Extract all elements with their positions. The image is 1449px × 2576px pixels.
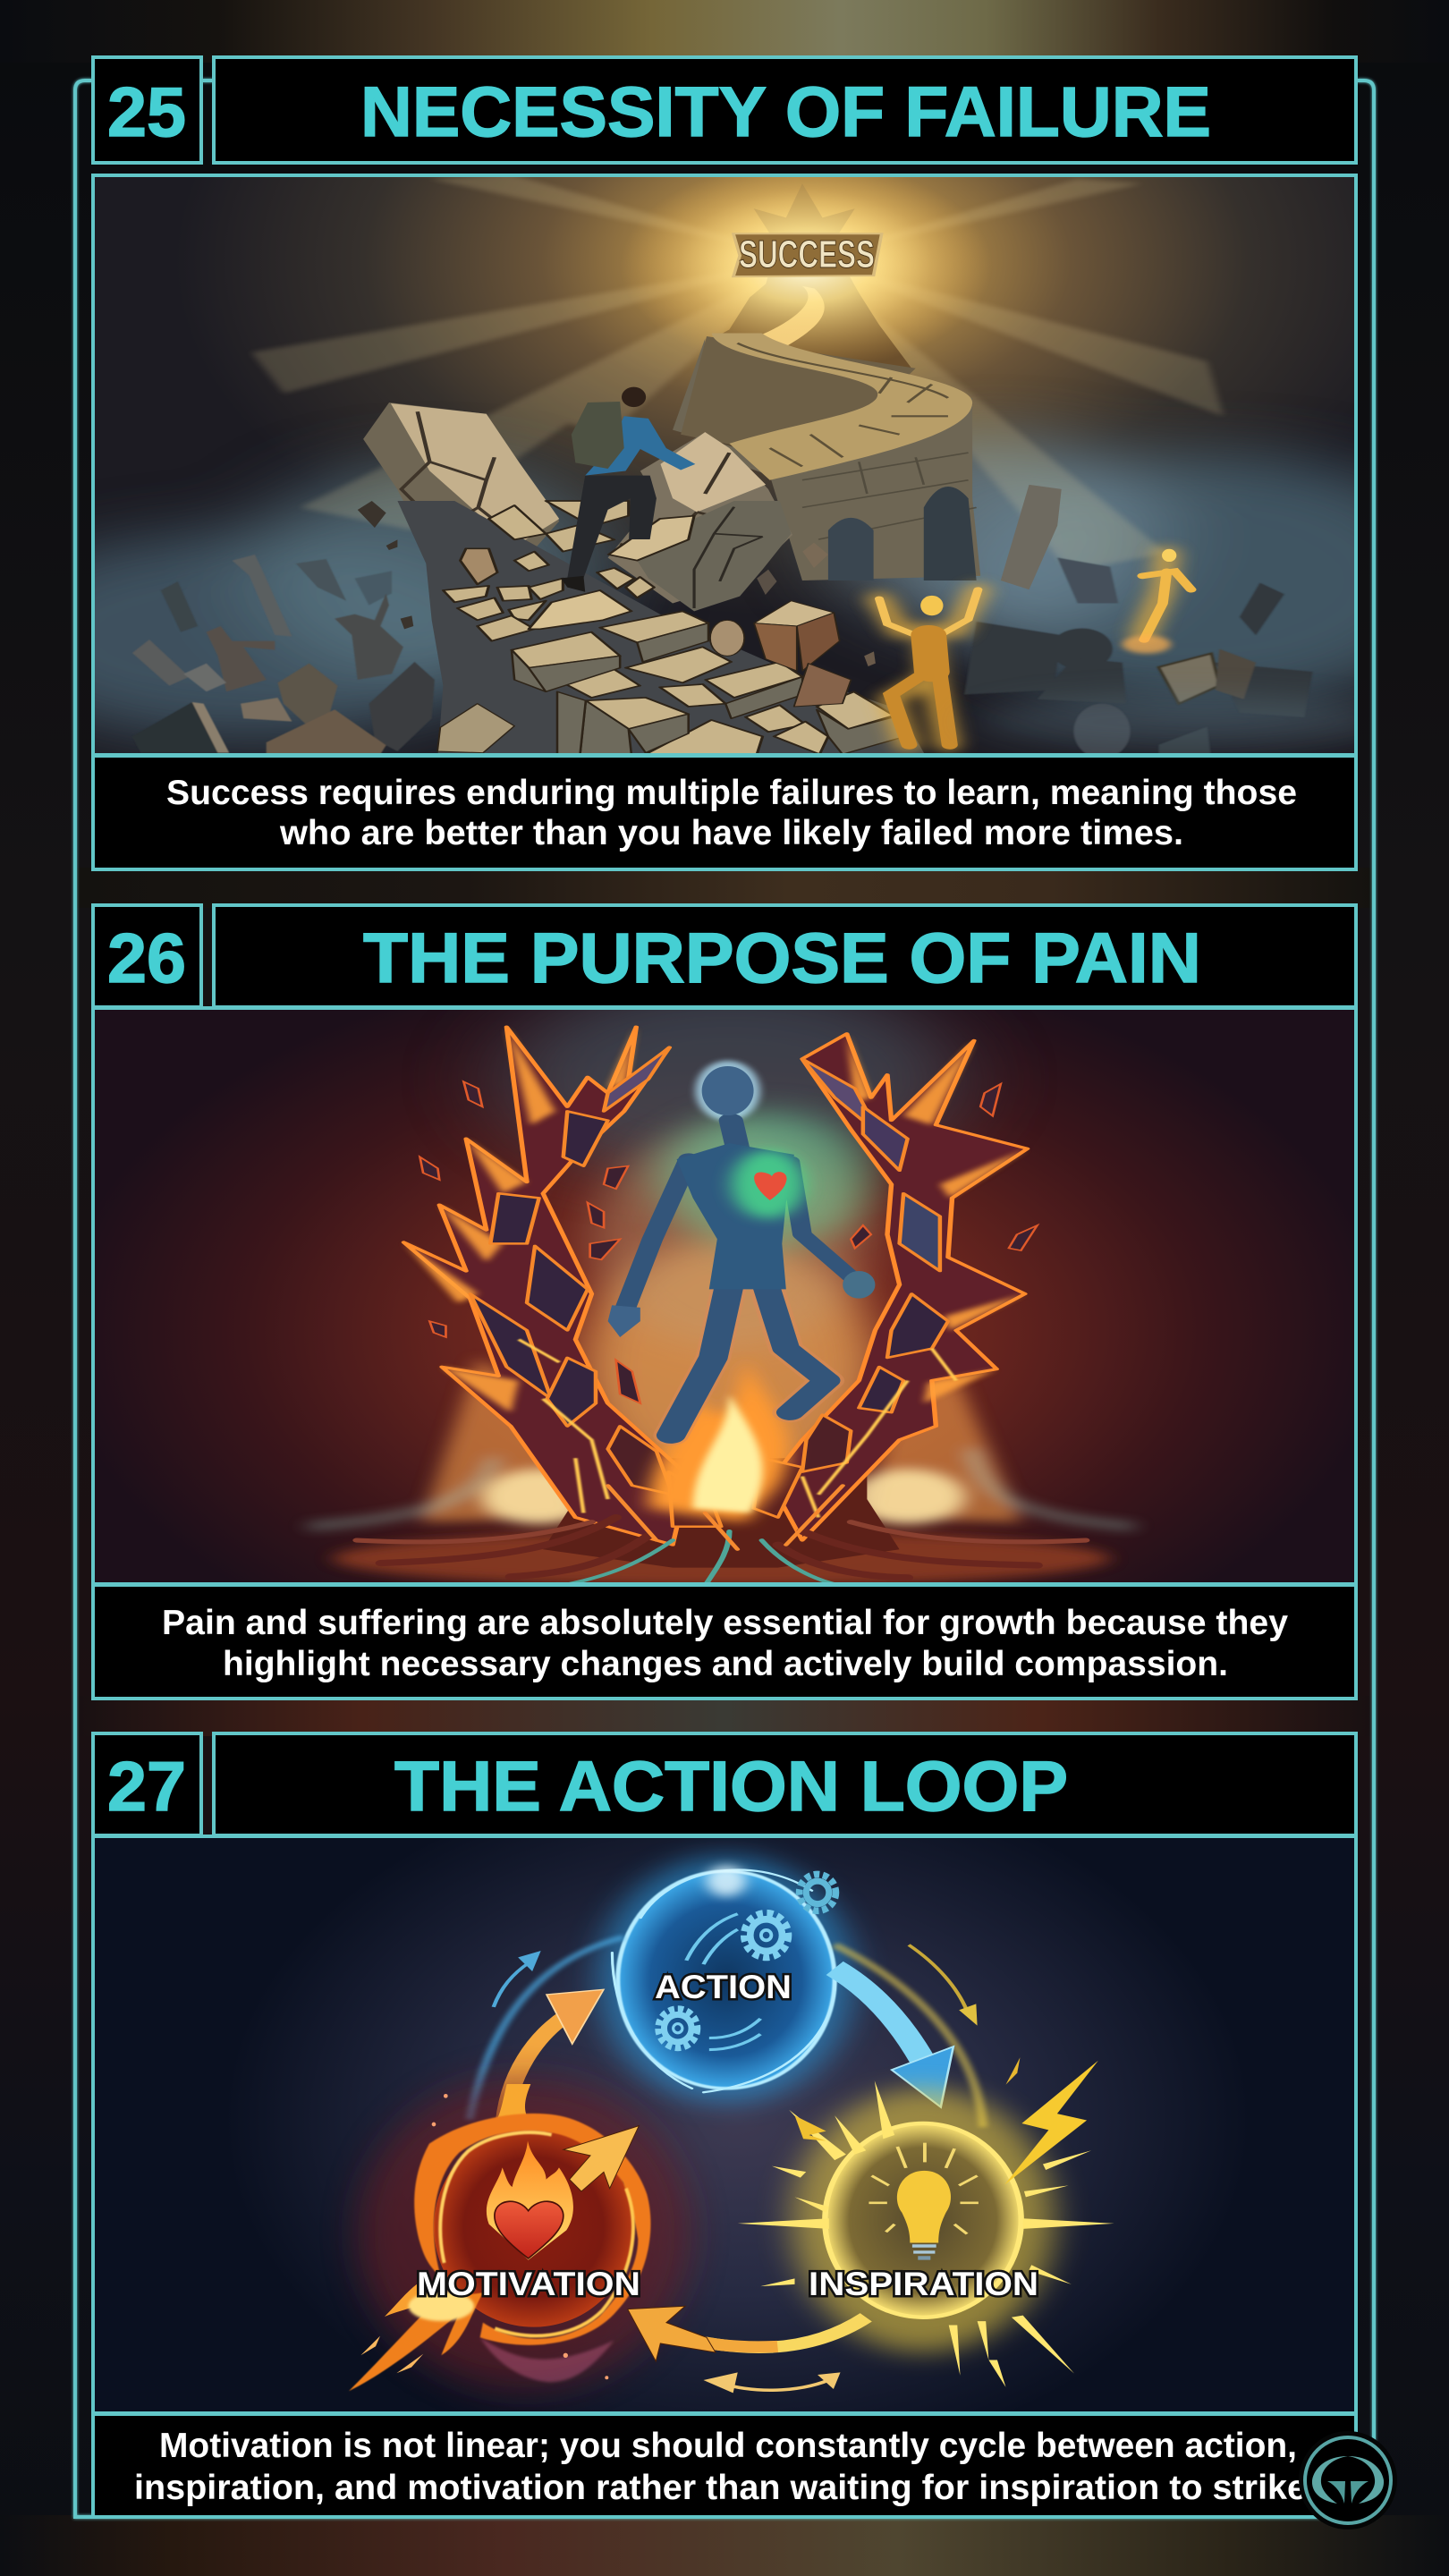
number box 25 (93, 57, 201, 163)
heading: the purpose of pain (214, 905, 1356, 1007)
number box 25: 25 (107, 72, 186, 151)
heading: the action loop (214, 1733, 1356, 1835)
illustration: action, inspiration, motivation cycle (76, 1825, 1445, 2430)
section 25 (91, 55, 1358, 871)
low mist (972, 695, 1394, 750)
motivation orb with heart (349, 2078, 716, 2391)
illustration: figure rising from burning shell (89, 979, 1360, 1590)
stone tower and wall (673, 333, 980, 580)
tan stones (443, 501, 894, 754)
flying shards (419, 1081, 1038, 1403)
node labels: action, motivation, inspiration: ACTION (655, 1969, 792, 2005)
small arrows (494, 1945, 978, 2393)
success banner (733, 233, 882, 276)
left shell wall (403, 1027, 721, 1545)
image border 25 (93, 175, 1356, 755)
number box 26: 26 (107, 919, 186, 997)
trunk (543, 1458, 900, 1568)
cracked boulder middle (608, 432, 792, 603)
section 27 (76, 1733, 1445, 2517)
flame around heart (487, 2140, 573, 2260)
logo badge (1299, 2431, 1397, 2529)
section 26 (89, 905, 1360, 1699)
heading: necessity of failure: NECESSITY OF FAILURE (360, 72, 1211, 151)
arrow: action to inspiration (835, 1968, 953, 2107)
rising figure (608, 1061, 875, 1436)
climber with backpack (561, 387, 695, 592)
caption 25: Success requires enduring multiple failures to learn, meaning those (166, 774, 1297, 812)
central fire (648, 1358, 789, 1522)
inner glow (583, 1239, 875, 1495)
caption 27 (93, 2414, 1356, 2517)
node labels: action, motivation, inspiration (417, 1969, 1038, 2302)
incoming arrowhead (628, 2306, 716, 2361)
number box 26 (93, 905, 201, 1007)
arrow: inspiration to motivation (669, 2318, 866, 2347)
fallen statues (132, 555, 435, 754)
image border 26 (93, 1008, 1356, 1584)
number box 27: 27 (107, 1747, 186, 1826)
caption 27: Motivation is not linear; you should constantly cycle between action, (159, 2427, 1297, 2465)
ground glow (333, 1531, 1110, 1586)
standing pillar (1001, 485, 1062, 589)
connecting trails (470, 1937, 983, 2127)
light rays (251, 174, 1224, 572)
caption 25: who are better than you have likely failed more times. (279, 814, 1183, 852)
node labels: action, motivation, inspiration: INSPIRATION (809, 2266, 1038, 2302)
illustration: climber on crumbling road to success (95, 177, 1354, 753)
number box 27 (93, 1733, 201, 1835)
action orb (597, 1856, 854, 2104)
node labels: action, motivation, inspiration: MOTIVATION (417, 2266, 640, 2302)
right shell wall (754, 1034, 1028, 1540)
flame tails (349, 2292, 483, 2391)
caption 27: inspiration, and motivation rather than waiting for inspiration to strike. (134, 2469, 1317, 2507)
motivation arrow (564, 2126, 639, 2191)
stone sides (512, 623, 905, 754)
caption 26 (93, 1585, 1356, 1699)
rock column (397, 501, 928, 760)
cube and diamond blocks (437, 601, 851, 753)
light curtains at base (309, 1358, 1134, 1527)
cracked boulder left (363, 402, 559, 560)
flying rocks (358, 501, 876, 666)
foreground left ruins and stone steps (132, 501, 928, 760)
arrow: motivation to action (504, 1989, 604, 2131)
glowing golden figures (879, 549, 1191, 745)
inspiration orb (738, 2057, 1114, 2387)
caption 26: highlight necessary changes and actively build compassion. (223, 1645, 1228, 1683)
heading: the action loop: THE ACTION LOOP (394, 1746, 1068, 1826)
heading: necessity of failure (214, 57, 1356, 163)
peak and spire (705, 183, 911, 369)
caption 25 (93, 756, 1356, 869)
roots (357, 1486, 1086, 1586)
right debris and fallen figures (964, 557, 1312, 758)
sign text: SUCCESS (739, 233, 875, 276)
image border 27 (93, 1836, 1356, 2413)
heading: the purpose of pain: THE PURPOSE OF PAIN (363, 918, 1201, 997)
light bulb (869, 2143, 979, 2260)
caption 26: Pain and suffering are absolutely essential for growth because they (162, 1604, 1288, 1642)
